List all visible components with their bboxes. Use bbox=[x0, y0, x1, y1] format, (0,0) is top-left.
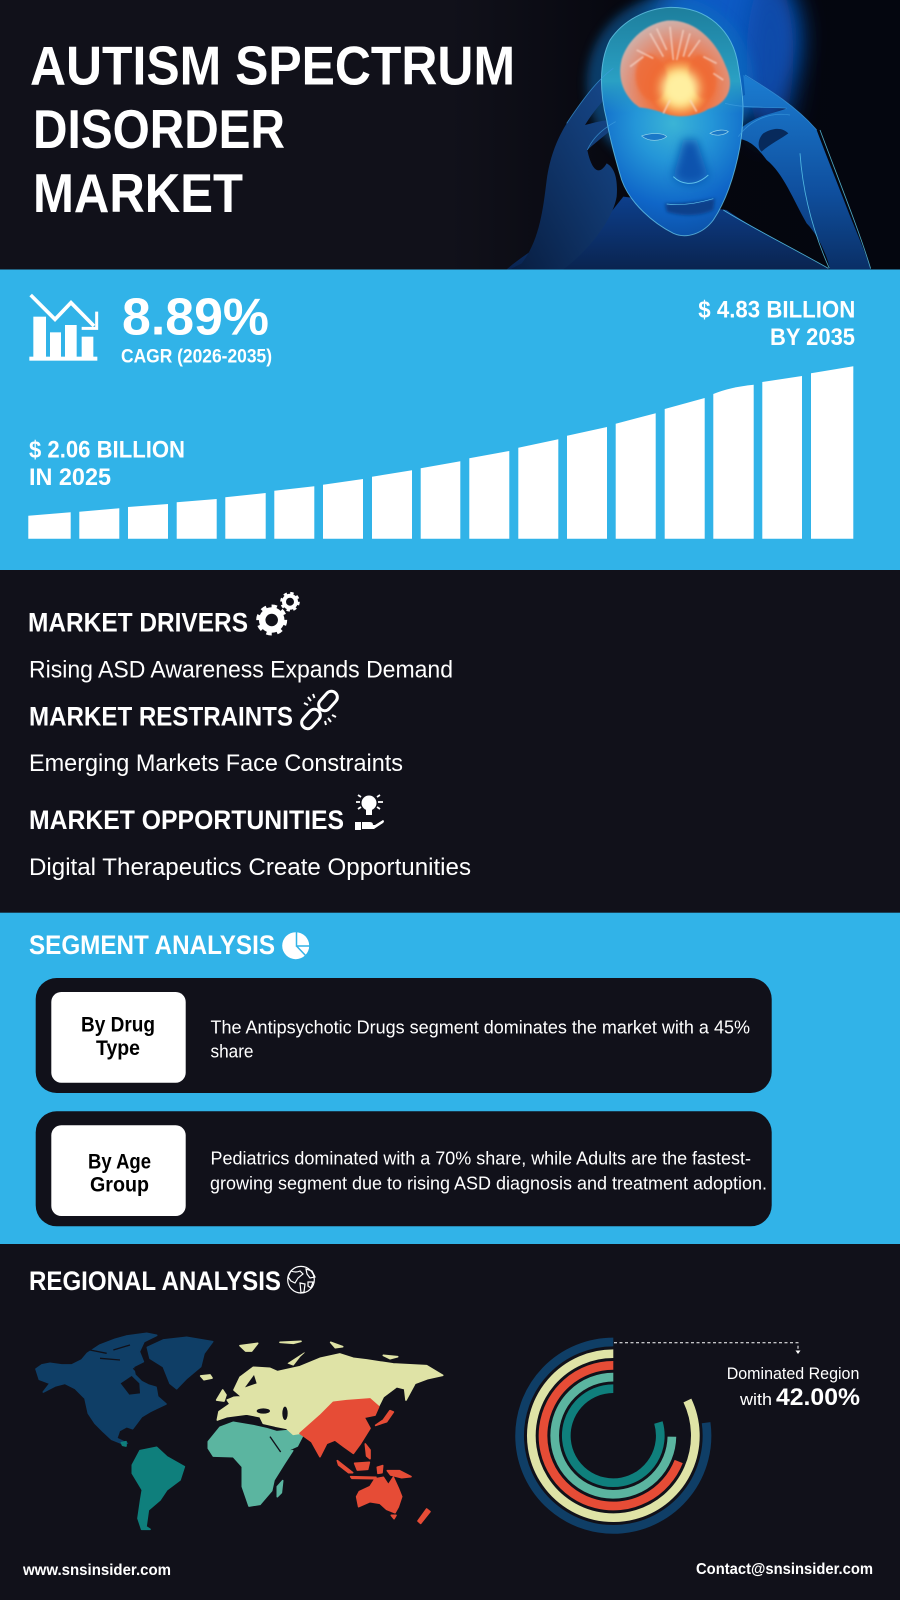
radial bar chart bbox=[520, 1342, 707, 1529]
CAGR value: 8.89% bbox=[122, 288, 269, 346]
2035 market value: BY 2035 bbox=[770, 324, 855, 351]
description: drug type: The Antipsychotic Drugs segment dominates the market with a 45% bbox=[210, 1017, 750, 1037]
region: Europe and Russia bbox=[201, 1341, 443, 1434]
label box: by age group bbox=[51, 1125, 186, 1216]
label box: by drug type: Type bbox=[96, 1037, 140, 1060]
label box: by age group: By Age bbox=[88, 1150, 151, 1173]
icon: chart with trend arrow bbox=[29, 295, 97, 361]
description: drug type: share bbox=[210, 1042, 254, 1062]
card: by drug type bbox=[36, 978, 772, 1093]
description: drug type bbox=[210, 1017, 750, 1062]
description: age group: Pediatrics dominated with a 70% share, while Adults are the fastest- bbox=[210, 1148, 751, 1168]
card: by age group bbox=[36, 1111, 772, 1226]
ring: Asia Pacific bbox=[543, 1365, 679, 1506]
footer: website: www.snsinsider.com bbox=[22, 1562, 171, 1579]
text: restraint: Emerging Markets Face Constraints bbox=[29, 750, 403, 777]
description: age group bbox=[210, 1148, 767, 1193]
world map bbox=[36, 1333, 443, 1529]
ring: North America bbox=[520, 1342, 707, 1529]
callout arrow: dashed leader bbox=[614, 1343, 800, 1354]
region: Middle East and Africa bbox=[208, 1422, 303, 1506]
text: driver: Rising ASD Awareness Expands Demand bbox=[29, 656, 453, 683]
text: opportunity: Digital Therapeutics Create Opportunities bbox=[29, 854, 471, 881]
heading: segment analysis: SEGMENT ANALYSIS bbox=[29, 930, 275, 960]
callout: dominated region: with bbox=[739, 1391, 772, 1409]
title bbox=[30, 35, 515, 224]
heading: market opportunities: MARKET OPPORTUNITIES bbox=[29, 805, 344, 835]
2025 market value bbox=[29, 437, 185, 491]
panel: segment analysis bbox=[0, 913, 900, 1244]
description: age group: growing segment due to rising ASD diagnosis and treatment adoption. bbox=[210, 1173, 767, 1193]
CAGR label: CAGR (2026-2035) bbox=[121, 346, 272, 368]
heading: regional analysis: REGIONAL ANALYSIS bbox=[29, 1266, 281, 1296]
bar chart: growth 2025 to 2035 bbox=[28, 366, 853, 539]
2035 market value: $ 4.83 BILLION bbox=[698, 297, 855, 324]
footer: contact: Contact@snsinsider.com bbox=[696, 1561, 873, 1578]
ring: Latin America bbox=[566, 1389, 660, 1483]
label box: by age group: Group bbox=[90, 1174, 149, 1197]
region: Latin America bbox=[121, 1442, 184, 1529]
heading: market restraints: MARKET RESTRAINTS bbox=[29, 702, 293, 732]
ring: Middle East and Africa bbox=[555, 1377, 672, 1494]
ring: Europe bbox=[531, 1354, 695, 1518]
region: Asia Pacific bbox=[300, 1399, 430, 1523]
callout: dominated region bbox=[727, 1365, 860, 1411]
panel: market dynamics bbox=[28, 593, 471, 881]
title: DISORDER bbox=[33, 99, 285, 160]
callout: dominated region: 42.00% bbox=[776, 1384, 860, 1411]
title: MARKET bbox=[33, 163, 243, 224]
heading: market drivers: MARKET DRIVERS bbox=[28, 608, 248, 638]
icon: globe bbox=[288, 1266, 315, 1293]
2025 market value: $ 2.06 BILLION bbox=[29, 437, 185, 464]
icon: pie chart bbox=[282, 932, 310, 959]
2025 market value: IN 2025 bbox=[29, 464, 111, 491]
panel: market size bbox=[0, 270, 900, 570]
region: North America bbox=[36, 1333, 213, 1443]
icon: gears bbox=[258, 593, 299, 634]
icon: broken chain bbox=[299, 689, 340, 731]
label box: by drug type: By Drug bbox=[81, 1014, 155, 1037]
header image: glowing head with brain bbox=[450, 0, 900, 269]
label box: by drug type bbox=[51, 992, 186, 1083]
title: AUTISM SPECTRUM bbox=[30, 35, 515, 96]
callout: dominated region: Dominated Region bbox=[727, 1365, 859, 1383]
2035 market value bbox=[698, 297, 855, 351]
icon: lightbulb in hand bbox=[355, 795, 384, 830]
